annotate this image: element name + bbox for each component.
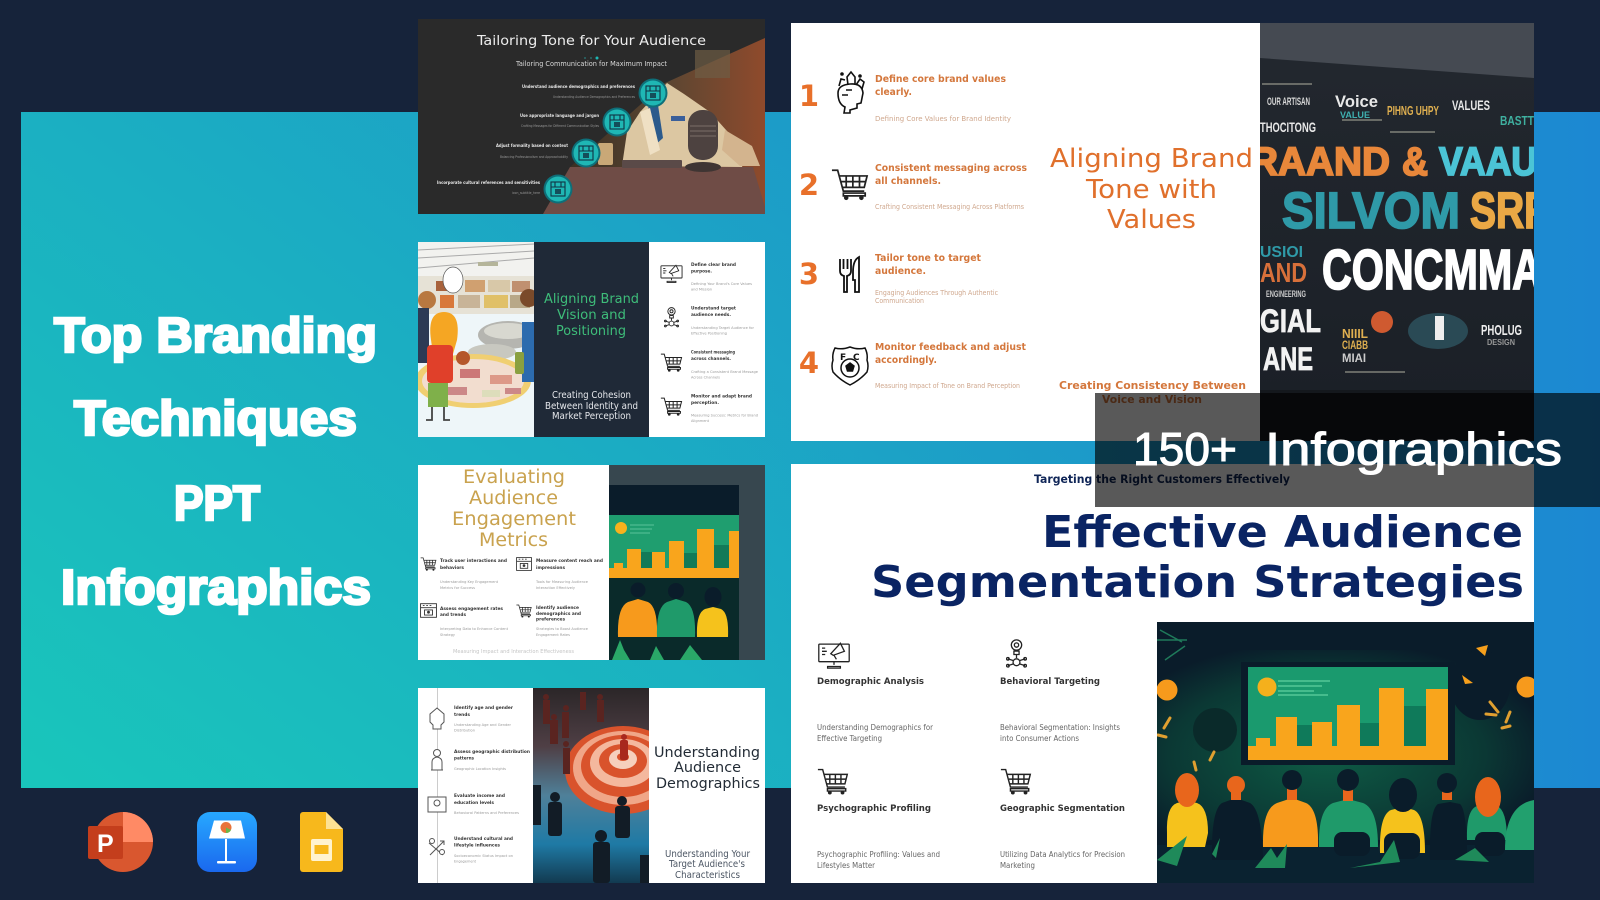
list descriptions: Socioeconomic Status Impact on	[454, 854, 513, 858]
panel: slide Aligning Brand Vision and Positioning	[415, 242, 765, 437]
heading: Metrics	[479, 530, 548, 551]
subtitle: Creating Cohesion	[552, 390, 631, 401]
icon: FC shield: F	[840, 353, 846, 363]
descriptions: Behavioral Segmentation: Insights	[1000, 723, 1120, 732]
subheading: Tailoring Communication for Maximum Impact	[515, 60, 667, 68]
list items: all channels.	[875, 176, 941, 187]
heading: Demographics	[656, 776, 760, 792]
list items: Evaluate income and	[454, 793, 505, 799]
descriptions: Marketing	[1000, 861, 1035, 870]
icon: PowerPoint: P	[97, 830, 114, 858]
descriptions: Effective Targeting	[817, 734, 882, 743]
icon: FC shield	[832, 347, 868, 385]
subtitle: Target Audience's	[668, 859, 745, 870]
illustration: brand typography wall: THOCITONG	[1260, 119, 1316, 135]
list items: across channels.	[691, 356, 731, 362]
list descriptions: Understanding Key Engagement	[440, 580, 499, 584]
icons	[661, 265, 682, 416]
list descriptions: and Mission	[691, 288, 712, 292]
title: Top Branding Techniques PPT Infographics: Infographics	[61, 561, 371, 615]
icon: Google Slides	[300, 812, 343, 872]
list items: Use appropriate language and jargon	[520, 113, 599, 119]
illustration: brand typography wall: GIAL	[1260, 303, 1321, 339]
list items: lifestyle influences	[454, 842, 500, 848]
descriptions: Utilizing Data Analytics for Precision	[1000, 850, 1125, 859]
subtitle: Market Perception	[552, 411, 631, 422]
heading	[1050, 144, 1253, 235]
illustration: brand typography wall: BASTT	[1500, 113, 1534, 128]
list items: Incorporate cultural references and sensitivities	[437, 180, 540, 186]
list items: Understand cultural and	[454, 836, 513, 842]
illustration: brand typography wall: ENGINEERING	[1266, 289, 1306, 299]
panel: slide Tailoring Tone for Your Audience	[418, 19, 765, 214]
illustration: brand typography wall: CIABB	[1342, 338, 1368, 352]
panel: slide Evaluating Audience Engagement Metrics	[418, 465, 765, 660]
illustration: brand typography wall: &	[1402, 140, 1428, 184]
heading: Engagement	[452, 509, 576, 530]
list descriptions: Strategy	[440, 633, 455, 637]
list items: Tailor tone to target	[875, 253, 981, 264]
icon: head with ideas	[838, 72, 864, 113]
subtitle: Voice and Vision	[1102, 394, 1202, 406]
list descriptions: Crafting Consistent Messaging Across Platforms	[875, 203, 1024, 211]
column headings: Demographic Analysis	[817, 677, 924, 687]
title: Top Branding Techniques PPT Infographics: Techniques	[74, 392, 357, 446]
list descriptions: Crafting a Consistent Brand Message	[691, 370, 758, 374]
list descriptions: Tools for Measuring Audience	[535, 580, 588, 584]
column headings: Behavioral Targeting	[1000, 677, 1100, 687]
illustration: brand typography wall: MIAI	[1342, 351, 1366, 365]
heading	[871, 507, 1524, 608]
list items: patterns	[454, 756, 474, 762]
timeline line	[437, 688, 438, 883]
list items: perception.	[691, 400, 719, 406]
list items	[440, 558, 603, 622]
list items: Assess geographic distribution	[454, 749, 530, 755]
list items: Understanding Audience Demographics and Preferences	[553, 95, 635, 99]
numerals: 3	[799, 257, 819, 291]
list descriptions	[691, 282, 758, 423]
list descriptions: Effective Positioning	[691, 332, 727, 336]
illustration: brand typography wall: Voice	[1335, 92, 1378, 111]
heading: Segmentation Strategies	[871, 557, 1524, 608]
heading: Aligning Brand	[544, 292, 639, 307]
list items: Monitor feedback and adjust	[875, 342, 1026, 353]
heading: Values	[1107, 205, 1196, 235]
subtitle: Characteristics	[675, 870, 740, 881]
column headings: Geographic Segmentation	[1000, 804, 1125, 814]
heading: Tailoring Tone for Your Audience	[476, 34, 706, 49]
title: Top Branding Techniques PPT Infographics	[54, 309, 377, 615]
illustration: brand typography wall: VAAU	[1439, 140, 1537, 184]
numerals: 2	[799, 168, 819, 202]
list items: Track user interactions and	[440, 558, 507, 564]
banner: translucent dark overlay	[1095, 393, 1600, 507]
list descriptions: Geographic Location Insights	[454, 767, 506, 771]
heading: Positioning	[556, 324, 626, 339]
list items: Crafting Messages for Different Communication Styles	[521, 124, 599, 128]
subtitle	[665, 849, 750, 881]
list descriptions: Engagement	[454, 860, 477, 864]
list items: Identify age and gender	[454, 705, 514, 711]
banner text: 150+ Infographics: Infographics	[1265, 423, 1562, 475]
list items: education levels	[454, 800, 494, 806]
panel: slide Aligning Brand Tone with Values	[791, 23, 1548, 441]
title: Top Branding Techniques PPT Infographics: Top Branding	[54, 309, 377, 363]
descriptions: Lifestyles Matter	[817, 861, 876, 870]
illustration: brand typography wall: OUR ARTISAN	[1267, 96, 1310, 108]
list items: Define core brand values	[875, 74, 1006, 85]
illustration: brand typography wall: PIHNG UHPY	[1387, 103, 1439, 118]
list descriptions	[875, 115, 1024, 390]
list descriptions: Metrics for Success	[440, 586, 475, 590]
icon: Keynote	[197, 812, 257, 872]
subtitle	[545, 390, 638, 422]
list items: icon_subtitle_here	[512, 191, 540, 195]
list descriptions: Interpreting Data to Enhance Content	[440, 627, 509, 631]
list items: Assess engagement rates	[440, 606, 503, 612]
illustration: brand typography wall: AND	[1260, 257, 1307, 288]
illustration: brand typography wall	[1250, 23, 1548, 441]
heading: Aligning Brand	[1050, 144, 1253, 174]
list items: demographics and	[536, 611, 581, 617]
list descriptions: Behavioral Patterns and Preferences	[454, 811, 519, 815]
panel: slide Effective Audience Segmentation Strategies	[791, 464, 1538, 883]
list items: Identify audience	[536, 605, 579, 611]
list descriptions: Understanding Age and Gender	[454, 723, 512, 727]
illustration: audience watching bar chart	[1156, 622, 1538, 883]
list items: Consistent messaging across	[875, 163, 1027, 174]
illustration: brand typography wall: USIOI	[1260, 244, 1303, 261]
descriptions: Psychographic Profiling: Values and	[817, 850, 940, 859]
list items: trends	[454, 712, 470, 718]
list descriptions	[440, 580, 588, 637]
list items: Consistent messaging	[691, 350, 735, 356]
list descriptions: Distribution	[454, 728, 475, 732]
numerals	[799, 79, 819, 380]
list descriptions: Measuring Success: Metrics for Brand	[691, 414, 758, 418]
list items: Adjust formality based on context	[496, 143, 569, 149]
list items: behaviors	[440, 565, 464, 571]
illustration: brand typography wall: VALUES	[1452, 97, 1490, 113]
list descriptions: Engaging Audiences Through Authentic	[875, 289, 998, 297]
banner text: 150+ Infographics: 150+	[1133, 423, 1237, 475]
list items: Understand audience demographics and preferences	[522, 84, 635, 90]
column headings: Psychographic Profiling	[817, 804, 931, 814]
tagline: Targeting the Right Customers Effectively	[1034, 472, 1290, 486]
subtitle: Understanding Your	[665, 849, 750, 860]
heading: Understanding	[654, 745, 760, 761]
list items	[454, 705, 530, 848]
list items	[437, 84, 635, 195]
descriptions	[817, 723, 1125, 870]
heading: Effective Audience	[1042, 507, 1523, 558]
banner text: 150+ Infographics	[1133, 423, 1562, 475]
list items: clearly.	[875, 87, 912, 98]
list items	[875, 74, 1027, 366]
subtitle	[1059, 380, 1246, 406]
descriptions: Understanding Demographics for	[817, 723, 934, 732]
list descriptions: Understanding Target Audience for	[691, 326, 755, 330]
heading	[654, 745, 760, 792]
list items: audience needs.	[691, 312, 731, 318]
heading: Audience	[674, 760, 741, 776]
list items: purpose.	[691, 268, 712, 274]
list items: impressions	[536, 565, 565, 571]
list items: Measure content reach and	[536, 558, 603, 564]
illustration: brand typography wall: DESIGN	[1487, 338, 1515, 347]
descriptions: into Consumer Actions	[1000, 734, 1079, 743]
progress dots	[584, 56, 598, 60]
title: Top Branding Techniques PPT Infographics: PPT	[174, 477, 260, 531]
list items: accordingly.	[875, 355, 937, 366]
column headings	[817, 677, 1125, 814]
list descriptions: Engagement Rates	[536, 633, 570, 637]
list descriptions: Alignment	[691, 419, 710, 423]
illustration: brand typography wall: ANE	[1263, 341, 1313, 377]
illustration: brand typography wall: SRF	[1470, 182, 1548, 239]
icon: fork and knife	[840, 257, 859, 292]
list descriptions: Strategies to Boost Audience	[536, 627, 588, 631]
list descriptions: Measuring Impact of Tone on Brand Perception	[875, 382, 1020, 390]
list items: Balancing Professionalism and Approachability	[500, 155, 568, 159]
icon: FC shield: C	[853, 353, 860, 363]
heading: Tone with	[1085, 175, 1217, 205]
illustration: brand typography wall: SILVOM	[1282, 182, 1460, 239]
icon: shopping cart	[832, 170, 867, 200]
illustration: brand typography wall: PHOLUG	[1481, 322, 1522, 339]
subtitle: Creating Consistency Between	[1059, 380, 1246, 392]
heading: Vision and	[557, 308, 626, 323]
icons	[428, 708, 446, 855]
numerals: 1	[799, 79, 819, 113]
icon: PowerPoint	[88, 812, 153, 872]
list descriptions: Across Channels	[691, 376, 720, 380]
list items: and trends	[440, 612, 466, 618]
illustration: presenter jacket and microphone	[543, 38, 765, 214]
icons: teal circles	[544, 78, 668, 204]
list items: Monitor and adapt brand	[691, 394, 752, 400]
list items	[691, 262, 752, 406]
illustration: audience and bar chart	[609, 485, 739, 660]
icons	[818, 640, 1030, 795]
list descriptions: Interaction Effectively	[536, 586, 575, 590]
list descriptions: Communication	[875, 297, 924, 305]
illustration: supermarket shoppers	[415, 242, 538, 437]
heading: Audience	[469, 488, 558, 509]
list items: preferences	[536, 616, 565, 622]
heading	[452, 467, 576, 551]
heading: Evaluating	[463, 467, 565, 488]
list items: Understand target	[691, 306, 737, 312]
list items: audience.	[875, 266, 926, 277]
illustration: brand typography wall: RAAND	[1250, 140, 1390, 184]
panel: slide Understanding Audience Demographics	[418, 688, 765, 883]
heading	[544, 292, 639, 339]
list items: Define clear brand	[691, 262, 736, 268]
numerals: 4	[799, 346, 819, 380]
illustration: target crowd	[533, 688, 649, 883]
illustration: brand typography wall: NIIIL	[1342, 326, 1368, 341]
subtitle: Between Identity and	[545, 401, 638, 412]
illustration: brand typography wall: VALUE	[1340, 110, 1370, 120]
list descriptions	[454, 723, 519, 864]
list descriptions: Defining Core Values for Brand Identity	[875, 115, 1011, 123]
background: teal to blue gradient band	[21, 112, 1600, 788]
list descriptions: Defining Your Brand's Core Values	[691, 282, 752, 286]
footer note: Measuring Impact and Interaction Effectiveness	[453, 649, 574, 655]
icons	[421, 558, 531, 618]
